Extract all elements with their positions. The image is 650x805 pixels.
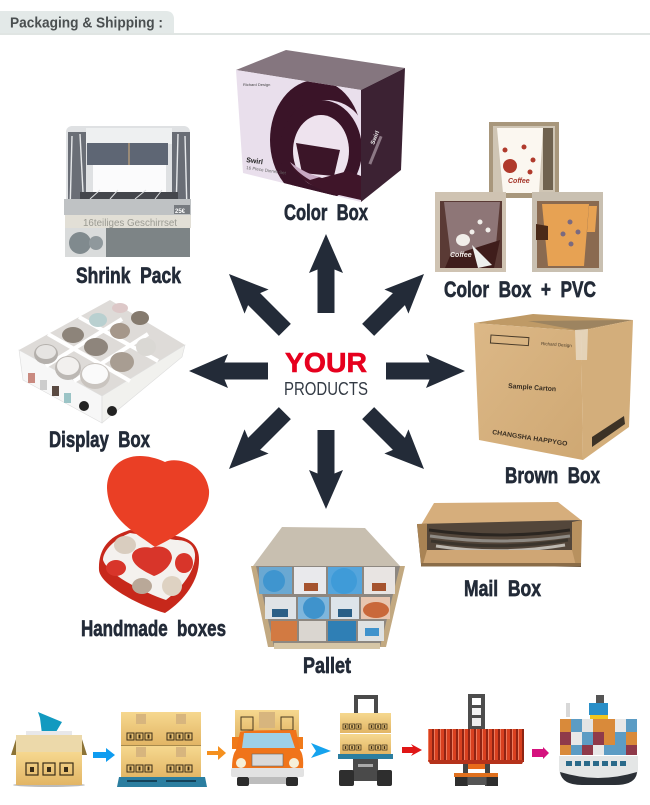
heart box base bbox=[99, 530, 199, 613]
step: forklift with container bbox=[428, 694, 524, 786]
label: Color Box: Color Box bbox=[284, 200, 369, 225]
arrow: left bbox=[189, 354, 268, 388]
label: Display Box: Display Box bbox=[49, 427, 151, 452]
arrow: red bbox=[402, 744, 422, 756]
header: Packaging & Shipping bbox=[0, 11, 650, 35]
arrow: blue bbox=[93, 748, 115, 762]
mug box: lower left brown: Coffee bbox=[450, 252, 472, 259]
product: brown box: Richard Design bbox=[541, 341, 572, 348]
arrows radiating from center bbox=[189, 234, 465, 509]
product: shrink pack bbox=[64, 126, 191, 257]
label: Mail Box: Mail Box bbox=[464, 576, 542, 601]
label: Pallet: Pallet bbox=[303, 653, 352, 678]
product: handmade heart box bbox=[99, 456, 209, 613]
arrow: right bbox=[386, 354, 465, 388]
product: pallet bbox=[251, 527, 405, 649]
label: Color Box + PVC: Color Box + PVC bbox=[444, 277, 596, 302]
product: color box: 16 Piece Dinner Set bbox=[246, 165, 287, 176]
product: color box bbox=[236, 50, 405, 202]
product: shrink pack: 25€ bbox=[175, 209, 186, 215]
label: Shrink Pack: Shrink Pack bbox=[76, 263, 182, 288]
product: color box + PVC bbox=[435, 122, 603, 272]
center text: YOUR PRODUCTS: PRODUCTS bbox=[284, 379, 368, 399]
center text: YOUR PRODUCTS: YOUR bbox=[285, 347, 367, 378]
product: mail box bbox=[417, 502, 582, 567]
arrow: down-right bbox=[356, 401, 436, 481]
step: truck bbox=[231, 710, 304, 786]
mug box: lower right orange bbox=[532, 192, 603, 272]
arrow: down bbox=[309, 430, 343, 509]
shipping process strip bbox=[11, 694, 638, 787]
product: color box: Swirl bbox=[370, 130, 381, 146]
heart lid bbox=[107, 456, 209, 547]
arrow: up-right bbox=[356, 262, 436, 342]
product: color box: Richard Design bbox=[243, 82, 270, 87]
product: brown box: Sample Carton bbox=[508, 383, 556, 393]
arrow: up bbox=[309, 234, 343, 313]
product: shrink pack: 16teiliges Geschirrset bbox=[83, 218, 177, 229]
product: display box bbox=[19, 300, 185, 423]
center text: YOUR PRODUCTS bbox=[284, 347, 368, 399]
step: container ship bbox=[559, 695, 638, 785]
header: Packaging & Shipping: Packaging & Shipping : bbox=[10, 16, 163, 32]
product: brown box bbox=[474, 314, 633, 460]
product: brown box: CHANGSHA HAPPYGO bbox=[492, 429, 568, 448]
arrow: up-left bbox=[217, 262, 297, 342]
mug box: top white: Coffee bbox=[508, 178, 530, 185]
step: boxes on pallet bbox=[117, 712, 207, 787]
arrow: magenta bbox=[532, 747, 549, 759]
step: packed carton bbox=[11, 712, 87, 787]
label: Handmade boxes: Handmade boxes bbox=[81, 616, 226, 641]
label: Brown Box: Brown Box bbox=[505, 463, 601, 488]
product: color box: Swirl bbox=[246, 157, 263, 166]
mug box: top white bbox=[489, 122, 559, 198]
step: forklift with boxes bbox=[338, 697, 393, 786]
arrow: down-left bbox=[217, 401, 297, 481]
mug box: lower left brown bbox=[435, 192, 506, 272]
arrow: cyan chevron bbox=[311, 743, 331, 758]
arrow: orange bbox=[207, 746, 226, 760]
